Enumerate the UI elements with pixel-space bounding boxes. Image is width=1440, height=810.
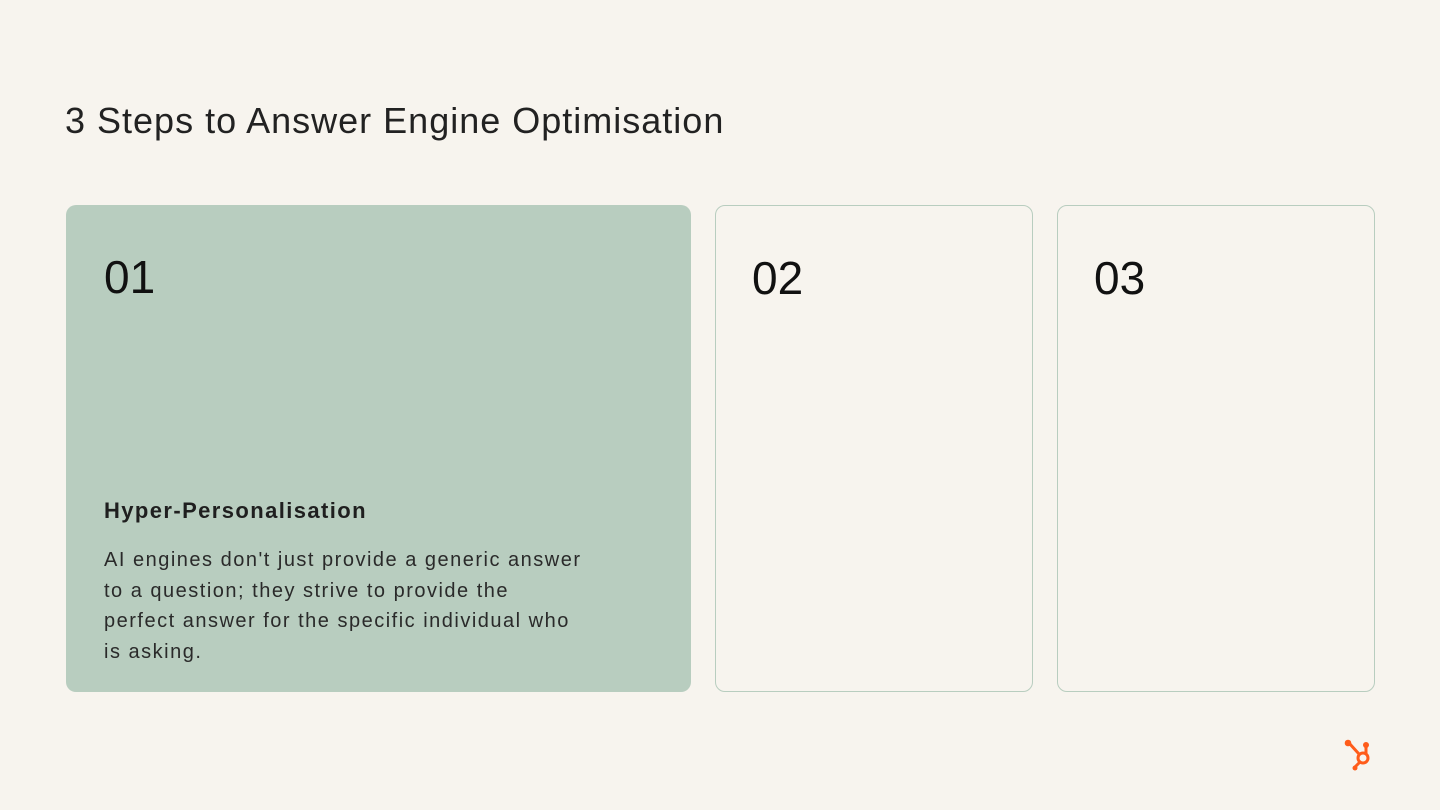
number 01: 01 — [104, 251, 155, 303]
panel: step 03 — [1057, 205, 1375, 692]
text block: description: perfect answer for the specific individual who — [104, 610, 570, 632]
title: 3 Steps to Answer Engine Optimisation — [65, 100, 724, 141]
number 02: 02 — [752, 252, 803, 304]
icon: hubspot logo — [1344, 740, 1370, 770]
text block: description: is asking. — [104, 640, 202, 662]
number 03: 03 — [1094, 252, 1145, 304]
text block: description — [104, 549, 582, 662]
heading: Hyper-Personalisation: Hyper-Personalisation — [104, 498, 367, 523]
text block: description: AI engines don't just provide a generic answer — [104, 549, 582, 571]
text block: description: to a question; they strive to provide the — [104, 580, 509, 602]
panel: step 01 — [66, 205, 691, 692]
panel: step 02 — [715, 205, 1033, 692]
